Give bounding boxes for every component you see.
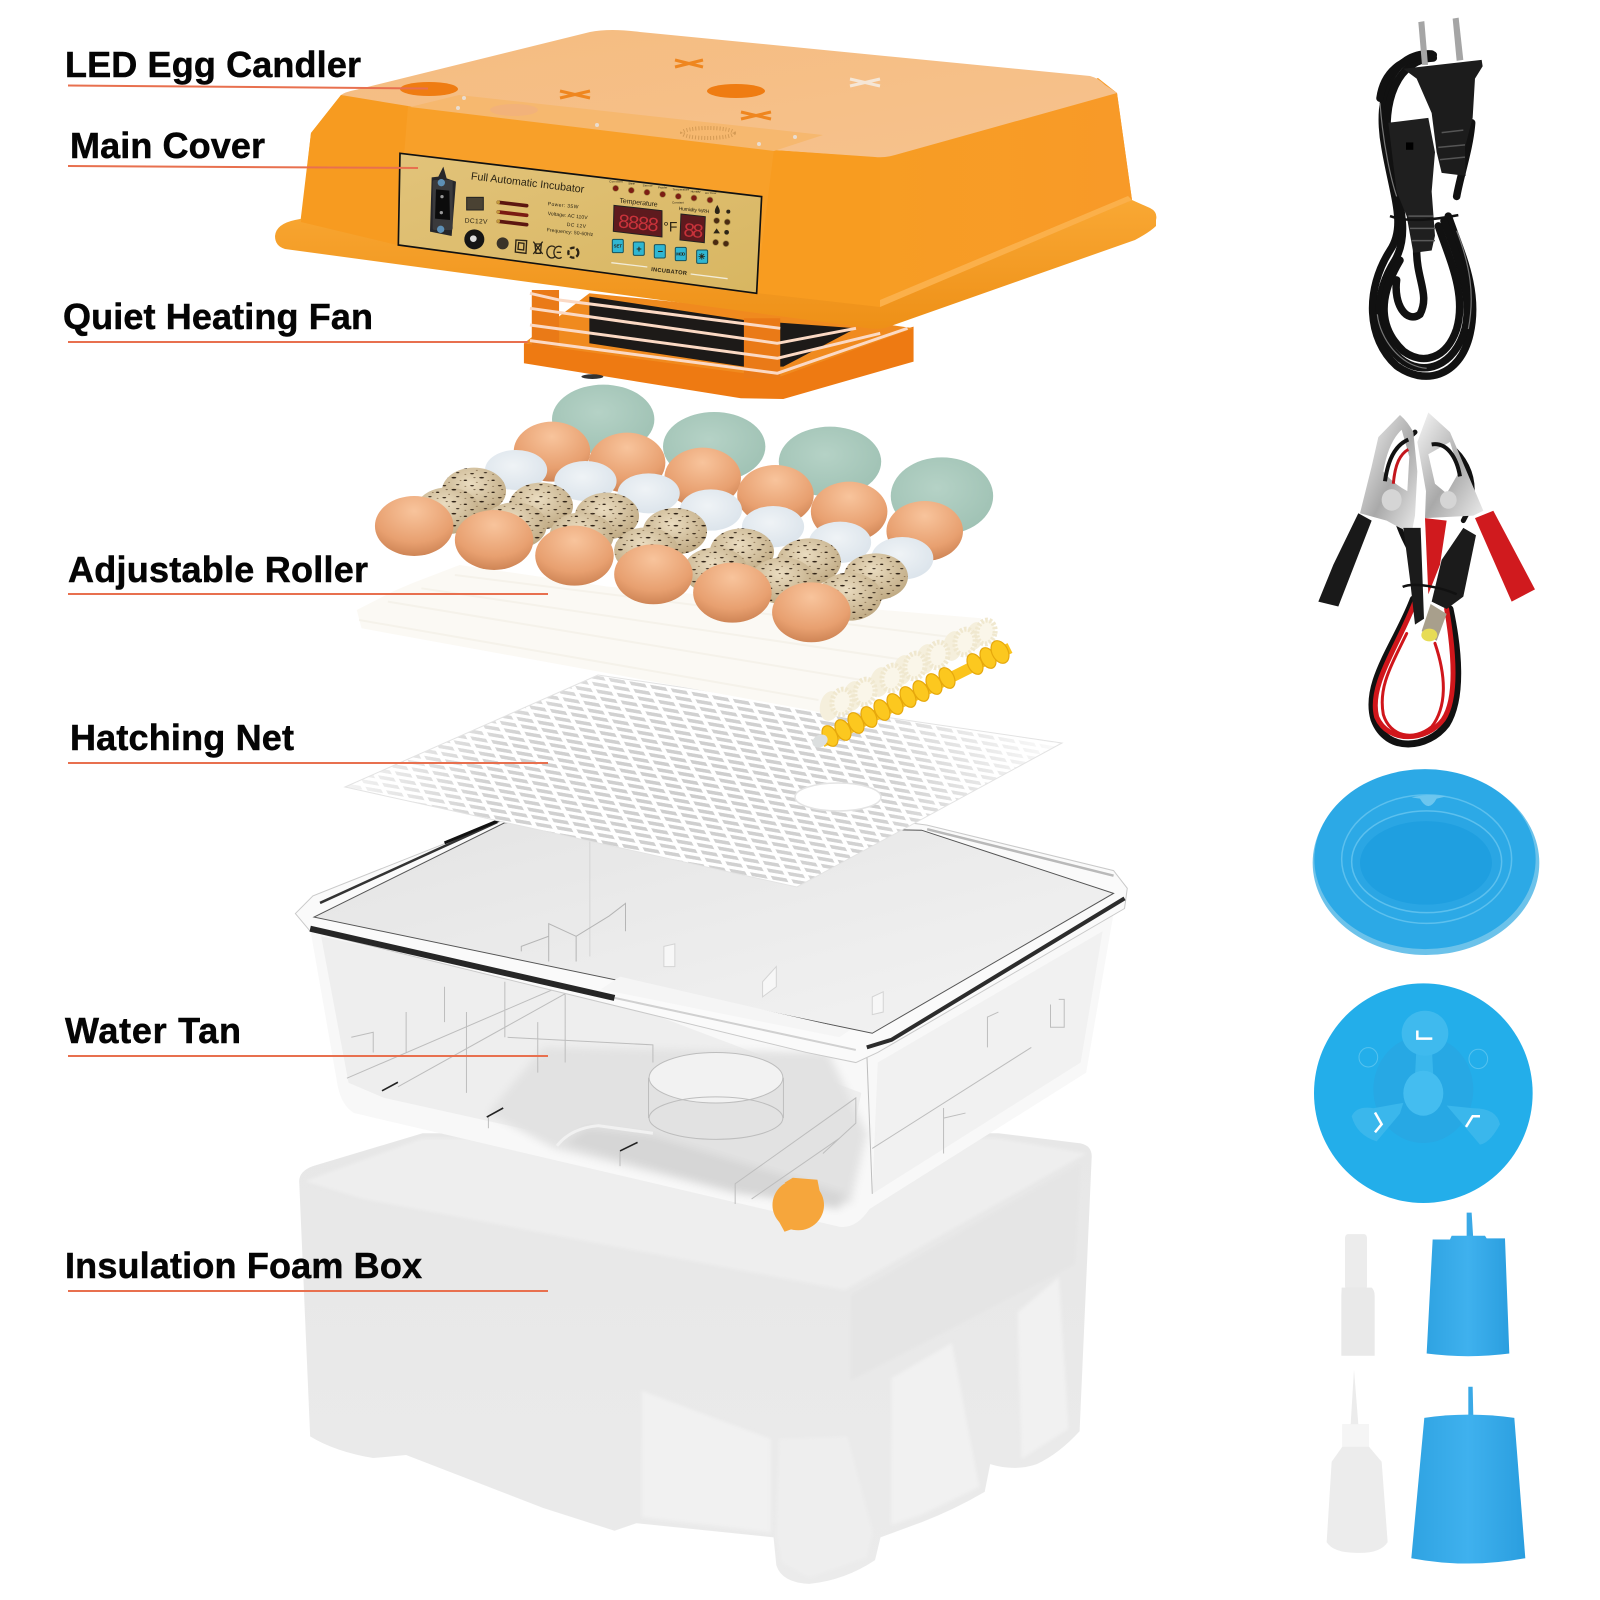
button captions: + <box>636 244 642 254</box>
yellow rod <box>810 638 1013 750</box>
slanted control plate <box>410 95 823 151</box>
cord bundle <box>1373 54 1473 376</box>
button captions: SET <box>614 244 622 249</box>
brown eggs back row <box>514 422 963 561</box>
front facet <box>397 106 774 293</box>
specifications: Power: 35W <box>547 201 579 211</box>
dc jack <box>464 229 484 249</box>
right side <box>880 78 1132 307</box>
blue tray bottom <box>1314 983 1533 1203</box>
humidity label: Humidity %RH <box>678 206 710 215</box>
tank floor <box>488 1047 867 1209</box>
hatching net <box>345 675 1062 887</box>
label: Insulation Foam Box: Insulation Foam Box <box>65 1245 422 1286</box>
humidity display: 88 <box>682 220 705 245</box>
cable tie <box>1403 585 1457 594</box>
cord tie <box>1390 215 1458 220</box>
lamp captions <box>609 180 717 205</box>
label: Hatching Net: Hatching Net <box>70 717 294 758</box>
certification icons <box>497 237 578 258</box>
button captions <box>614 244 706 262</box>
white eggs <box>485 450 933 580</box>
plug prongs <box>1418 18 1463 65</box>
alligator clip cable <box>1318 413 1535 744</box>
control panel: DC12V <box>465 218 488 226</box>
adjustable roller <box>357 565 1013 750</box>
large blue cup <box>1411 1387 1525 1564</box>
specifications: DC 12V <box>566 222 587 230</box>
top face <box>341 30 1117 157</box>
cover base silhouette <box>300 80 1132 307</box>
wires <box>1372 432 1472 744</box>
lamp captions: Sensor <box>643 184 653 188</box>
control buttons <box>612 239 708 263</box>
appliance connector <box>1388 118 1435 253</box>
main cover <box>275 30 1156 329</box>
power cord <box>1373 18 1483 376</box>
red clip <box>1417 413 1483 518</box>
insulation foam box <box>299 1133 1092 1584</box>
quiet heating fan <box>524 290 914 399</box>
specifications: Frequency: 50-60Hz <box>546 227 594 238</box>
temperature label: Temperature <box>619 198 658 209</box>
cylinder <box>347 982 1064 1204</box>
lamp captions: Shine <box>628 182 635 186</box>
lamp captions: Airflow <box>705 191 717 195</box>
label: Main Cover: Main Cover <box>70 125 265 166</box>
dc plug <box>1432 528 1476 609</box>
candler hole <box>400 82 458 96</box>
button captions: − <box>658 247 664 257</box>
label: Water Tan: Water Tan <box>65 1010 241 1051</box>
indicator lamps <box>613 185 730 247</box>
plug body <box>1403 60 1483 176</box>
gears <box>817 618 997 723</box>
small blue cup <box>1427 1213 1509 1356</box>
temperature display: 8888 <box>617 211 660 239</box>
label: Quiet Heating Fan: Quiet Heating Fan <box>63 296 373 337</box>
black clip <box>1360 415 1417 533</box>
indicator strips <box>498 202 527 225</box>
incubator footer: INCUBATOR <box>651 267 687 277</box>
battery icon <box>467 197 483 210</box>
lamp captions: Humidity <box>691 189 701 193</box>
orange valve <box>772 1178 824 1232</box>
net hole <box>795 783 881 811</box>
blue tray top <box>1313 769 1539 955</box>
label: LED Egg Candler: LED Egg Candler <box>65 44 361 85</box>
lamp captions: Constant <box>609 180 623 184</box>
button captions: MOD <box>676 252 685 257</box>
dark rim bands <box>310 929 615 998</box>
function icons <box>713 205 730 235</box>
top crosses <box>560 60 880 119</box>
eggs <box>375 385 993 642</box>
fahrenheit mark: °F <box>663 218 677 234</box>
brown eggs front row <box>375 496 851 642</box>
power socket <box>430 167 456 236</box>
lamp captions: Temperature <box>673 187 690 191</box>
lamp captions: Constant <box>672 201 684 205</box>
white clip notches <box>1375 1031 1480 1132</box>
specifications <box>546 201 594 238</box>
specifications: Voltage: AC 110V <box>547 211 589 221</box>
green eggs <box>552 385 993 535</box>
right facet <box>756 150 880 307</box>
small spray bottle <box>1341 1234 1375 1356</box>
left facet <box>301 95 414 245</box>
rim and lid <box>295 790 1127 1063</box>
panel title: Full Automatic Incubator <box>470 170 585 196</box>
flange <box>275 200 1156 329</box>
control panel <box>398 153 762 293</box>
incubator footer <box>611 263 728 279</box>
center hole <box>707 84 765 98</box>
tank body <box>310 914 1114 1227</box>
quail eggs <box>416 468 908 621</box>
label: Adjustable Roller: Adjustable Roller <box>68 549 368 590</box>
button captions: ✳ <box>698 252 706 262</box>
dropper bottle <box>1327 1370 1388 1553</box>
plate screws and speaker <box>456 96 797 146</box>
water tank <box>295 790 1127 1232</box>
lamp captions: Proofer <box>658 186 667 190</box>
